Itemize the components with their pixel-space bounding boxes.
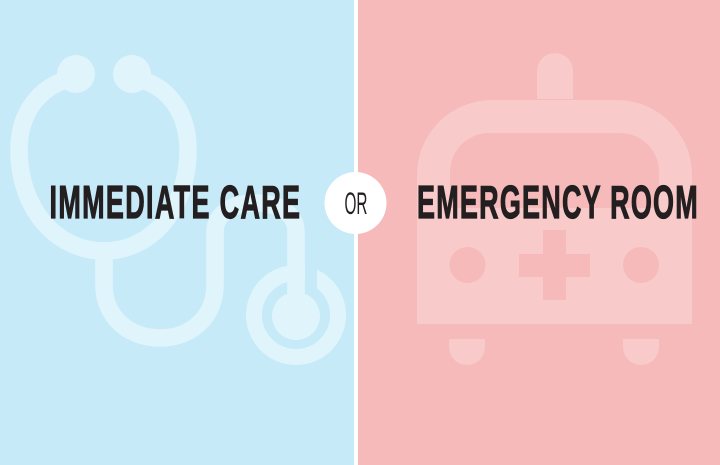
panel: emergency room [358, 0, 720, 465]
badge: or [324, 172, 386, 234]
icon: stethoscope [19, 55, 338, 357]
panel: immediate care [0, 0, 354, 465]
heading: emergency room: EMERGENCY ROOM [417, 178, 698, 229]
heading: immediate care: IMMEDIATE CARE [50, 178, 300, 229]
icon: ambulance [417, 53, 692, 365]
badge: or: OR [344, 185, 368, 221]
